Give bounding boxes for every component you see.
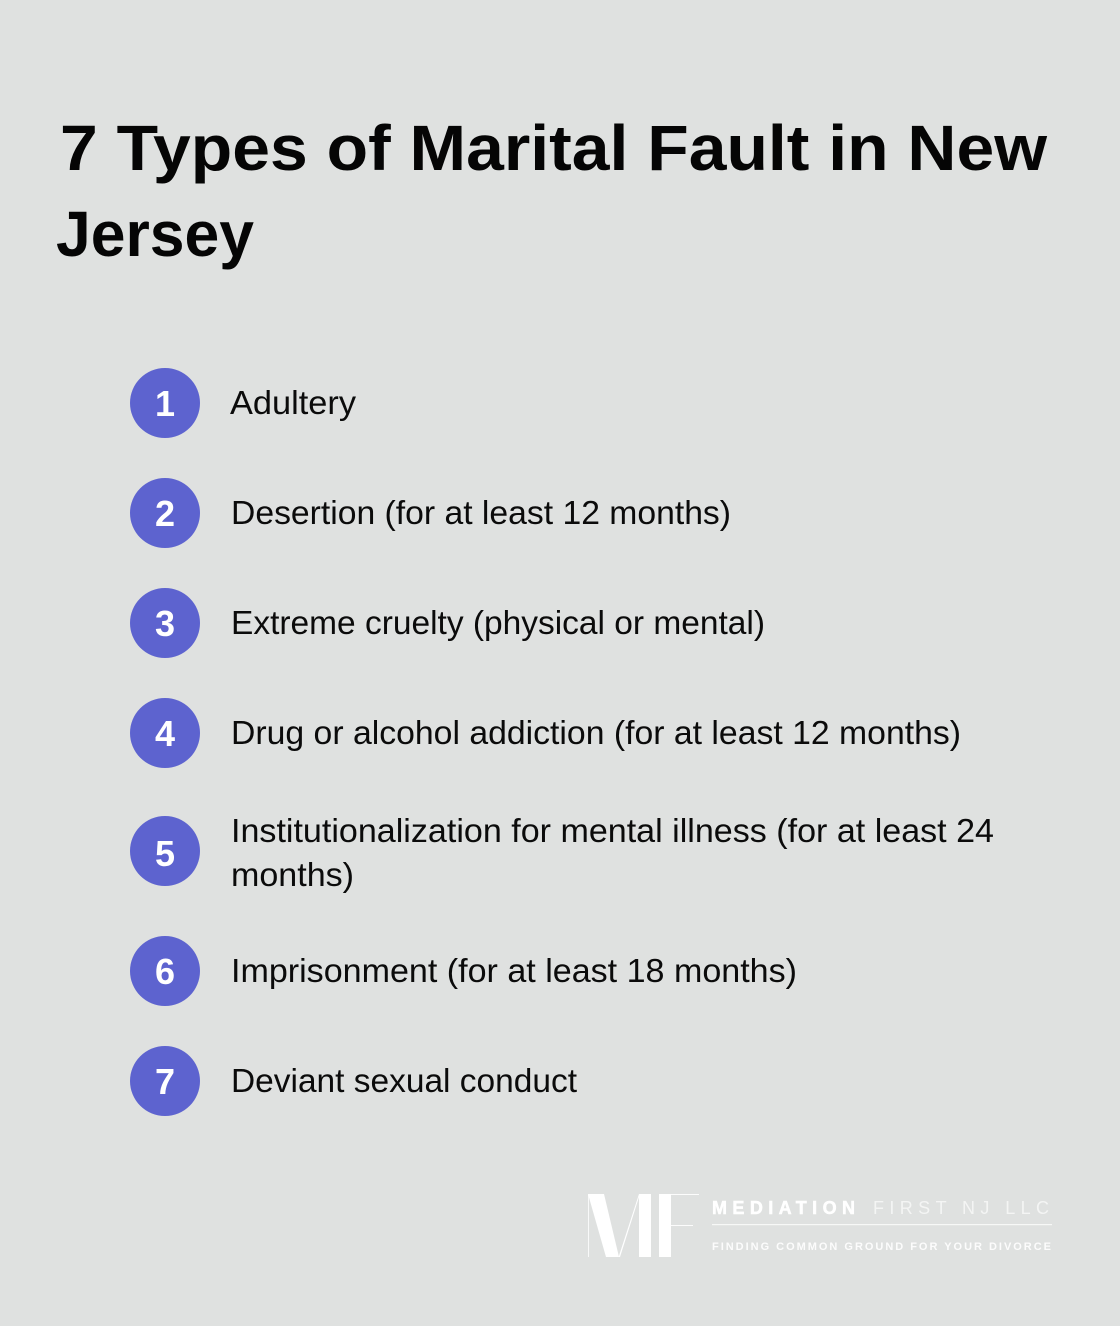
list item 3: 3 [155, 603, 175, 644]
logo: Mediation First NJ LLC: FIRST NJ LLC [873, 1198, 1049, 1218]
list item 3 [130, 588, 765, 658]
list item 7: 7 [155, 1061, 175, 1102]
logo: Mediation First NJ LLC [588, 1194, 1052, 1257]
list item 5: Institutionalization for mental illness (for at least 24 [231, 812, 994, 849]
list item 3: Extreme cruelty (physical or mental) [231, 604, 765, 641]
list item 1: Adultery [230, 384, 357, 421]
list item 2 [130, 478, 731, 548]
list item 7 [130, 1046, 577, 1116]
list item 6: 6 [155, 951, 175, 992]
list item 7: Deviant sexual conduct [231, 1062, 577, 1099]
list item 2: Desertion (for at least 12 months) [231, 494, 731, 531]
list item 5: months) [231, 856, 354, 893]
list item 5 [130, 812, 994, 893]
title [56, 112, 1047, 270]
title: 7 Types of Marital Fault in New [60, 112, 1047, 184]
logo name text: MEDIATION [712, 1198, 855, 1218]
list item 4 [130, 698, 961, 768]
list item 6 [130, 936, 797, 1006]
icon: MF monogram [588, 1194, 699, 1257]
list item 2: 2 [155, 493, 175, 534]
list item 4: Drug or alcohol addiction (for at least 12 months) [231, 714, 961, 751]
list item 1: 1 [155, 383, 175, 424]
list item 1 [130, 368, 357, 438]
list item 4: 4 [155, 713, 175, 754]
logo tagline: FINDING COMMON GROUND FOR YOUR DIVORCE [712, 1241, 1051, 1253]
title: Jersey [56, 198, 254, 270]
list item 6: Imprisonment (for at least 18 months) [231, 952, 797, 989]
list item 5: 5 [155, 833, 175, 874]
